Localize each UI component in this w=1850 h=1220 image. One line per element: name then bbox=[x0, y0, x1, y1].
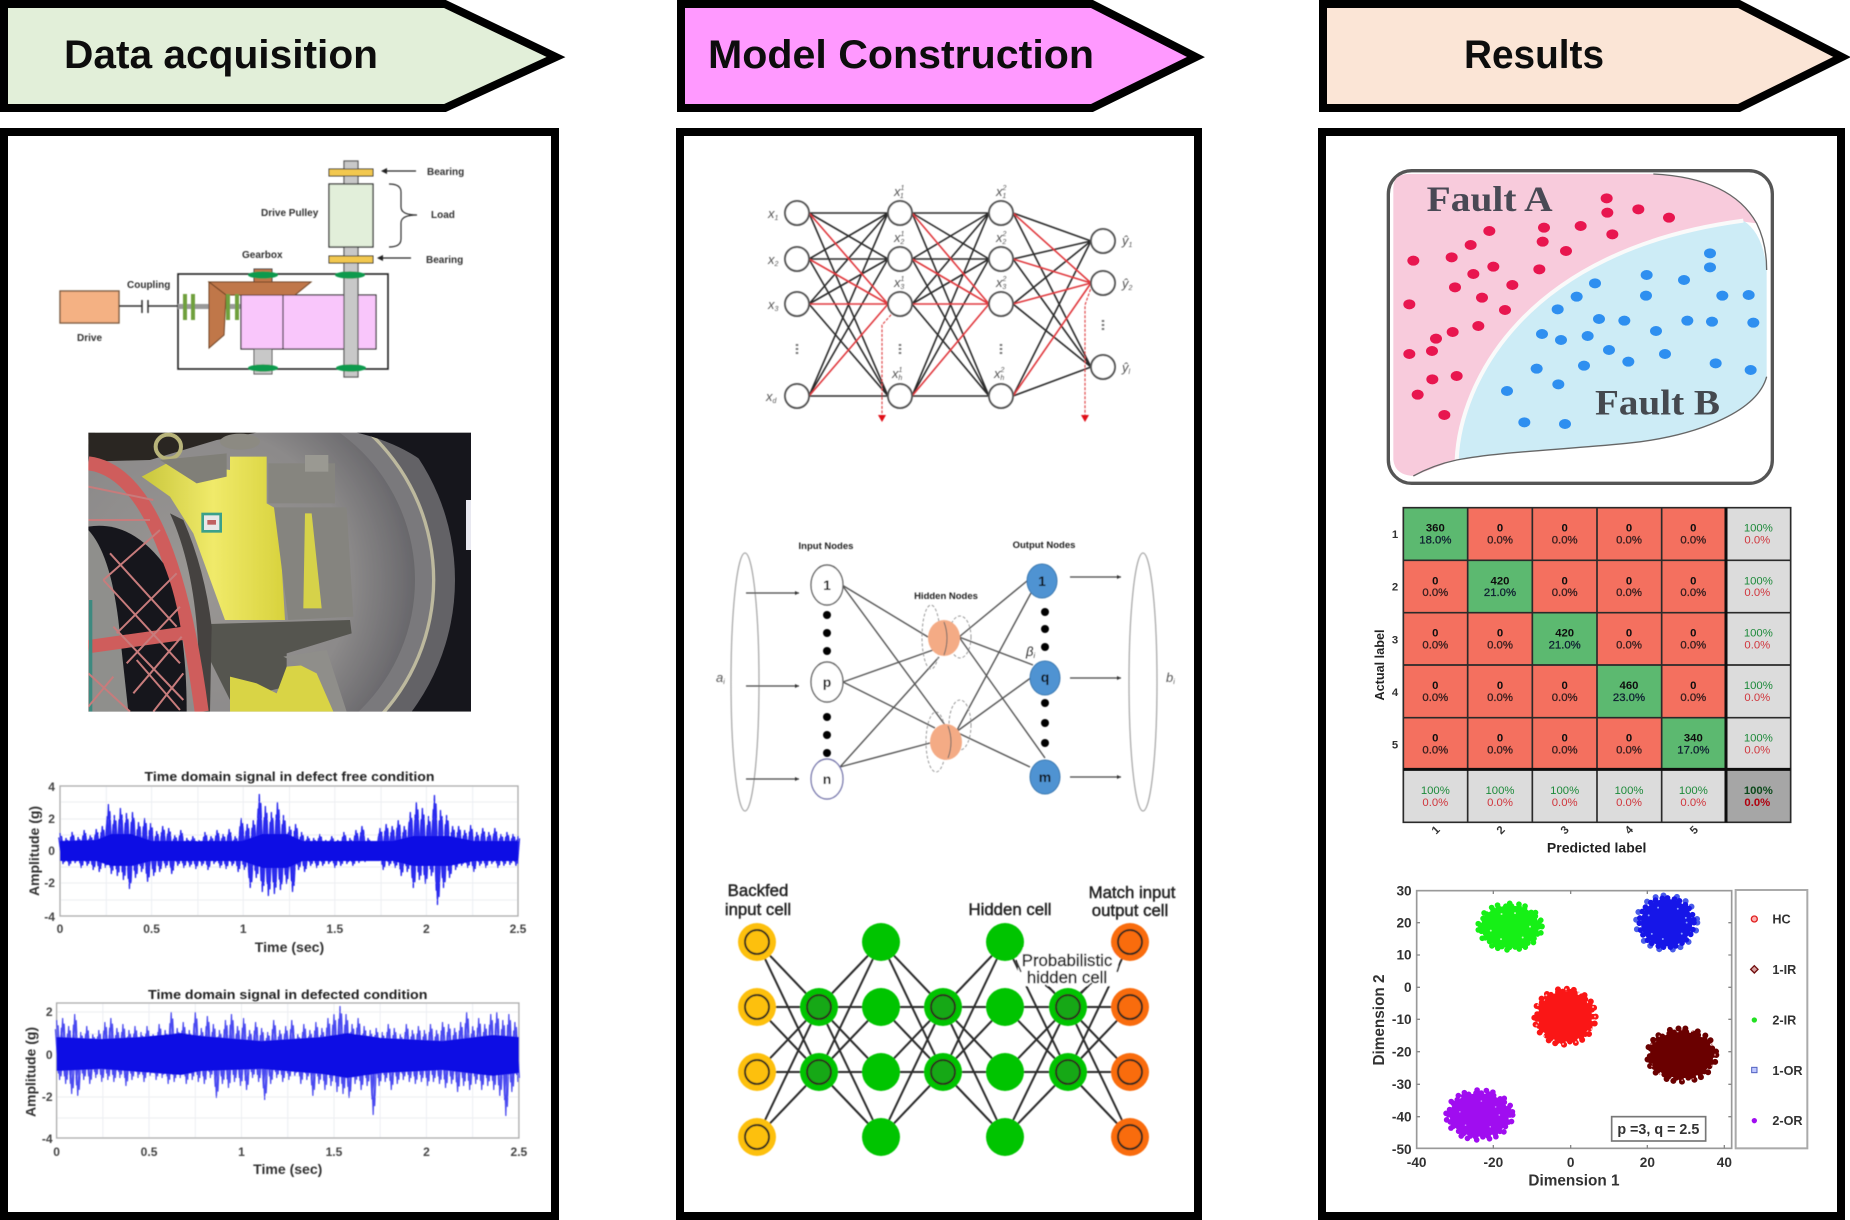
confusion matrix: 420 bbox=[1491, 575, 1509, 587]
scatter plot: t-SNE clusters: 10 bbox=[1396, 948, 1412, 963]
heading arrow: Model Construction: Model Construction bbox=[708, 33, 1094, 77]
chart: time domain signal in defect free condition: Time domain signal in defect free condition bbox=[145, 769, 434, 784]
chart: time domain signal in defected condition bbox=[22, 987, 528, 1177]
network diagram: deep belief network: x bbox=[996, 230, 1002, 245]
network diagram: deep belief network: 2 bbox=[1001, 239, 1006, 246]
network diagram: deep belief network: x bbox=[894, 184, 900, 199]
heading arrow: Data acquisition bbox=[4, 4, 556, 108]
gearbox schematic: Bearing bbox=[426, 255, 463, 266]
confusion matrix: 100% bbox=[1744, 785, 1773, 797]
confusion matrix: 0.0% bbox=[1552, 534, 1578, 546]
confusion matrix: 3 bbox=[1392, 634, 1398, 646]
network diagram: probabilistic cells: hidden cell bbox=[1027, 968, 1107, 987]
network diagram: deep belief network: 1 bbox=[900, 231, 904, 238]
confusion matrix: 460 bbox=[1620, 680, 1638, 692]
network diagram: extreme learning machine: i bbox=[1033, 653, 1035, 660]
confusion matrix: 0.0% bbox=[1422, 797, 1448, 809]
network diagram: extreme learning machine: a bbox=[716, 670, 723, 685]
gearbox schematic bbox=[60, 161, 464, 377]
confusion matrix: 0.0% bbox=[1422, 692, 1448, 704]
network diagram: deep belief network: x bbox=[996, 275, 1002, 290]
confusion matrix: 5 bbox=[1688, 824, 1701, 837]
scatter plot: t-SNE clusters: 0 bbox=[1567, 1155, 1575, 1170]
confusion matrix: Actual label bbox=[1373, 629, 1387, 701]
confusion matrix: 0.0% bbox=[1744, 534, 1770, 546]
confusion matrix: 1 bbox=[1430, 824, 1443, 837]
decision boundary plot: Fault A and Fault B: Fault A bbox=[1427, 179, 1553, 219]
network diagram: deep belief network: d bbox=[772, 398, 778, 405]
confusion matrix: 0 bbox=[1690, 523, 1696, 535]
legend: 2-IR bbox=[1772, 1014, 1796, 1028]
confusion matrix: 0 bbox=[1626, 733, 1632, 745]
network diagram: extreme learning machine: p bbox=[823, 674, 831, 690]
confusion matrix: 0.0% bbox=[1487, 639, 1513, 651]
confusion matrix: 0 bbox=[1626, 523, 1632, 535]
confusion matrix: 360 bbox=[1426, 523, 1445, 535]
network diagram: probabilistic cells: input cell bbox=[725, 900, 791, 919]
chart: time domain signal in defect free condition: Time (sec) bbox=[255, 939, 324, 955]
network diagram: deep belief network: h bbox=[1000, 375, 1004, 382]
confusion matrix: 2 bbox=[1392, 582, 1398, 594]
heading arrow: Results: Results bbox=[1464, 33, 1604, 77]
scatter plot: t-SNE clusters: -10 bbox=[1392, 1012, 1412, 1027]
confusion matrix: 100% bbox=[1486, 785, 1514, 797]
confusion matrix: 0 bbox=[1432, 628, 1438, 640]
confusion matrix: 21.0% bbox=[1484, 587, 1516, 599]
network diagram: probabilistic cells: Probabilistic bbox=[1022, 951, 1112, 970]
panel: model construction bbox=[680, 132, 1198, 1216]
waveform: defected bbox=[55, 1006, 519, 1116]
confusion matrix: 0 bbox=[1432, 575, 1438, 587]
chart: time domain signal in defected condition: -4 bbox=[42, 1132, 53, 1146]
confusion matrix: 0.0% bbox=[1552, 797, 1578, 809]
confusion matrix: 0 bbox=[1432, 733, 1438, 745]
confusion matrix: 100% bbox=[1744, 628, 1773, 640]
network diagram: deep belief network: 2 bbox=[1002, 276, 1006, 283]
network diagram: extreme learning machine: q bbox=[1041, 669, 1049, 685]
confusion matrix: 0.0% bbox=[1616, 797, 1642, 809]
network diagram: extreme learning machine: β bbox=[1026, 644, 1033, 659]
chart: time domain signal in defect free condition: 2 bbox=[423, 922, 430, 936]
panel: data acquisition bbox=[4, 132, 555, 1216]
confusion matrix: 0.0% bbox=[1744, 744, 1770, 756]
heading arrow: Model Construction bbox=[681, 4, 1196, 108]
cluster: 1-OR bbox=[1636, 895, 1697, 950]
network diagram: extreme learning machine: n bbox=[823, 771, 831, 787]
confusion matrix: 0.0% bbox=[1552, 692, 1578, 704]
network diagram: deep belief network: 2 bbox=[1128, 285, 1132, 292]
chart: time domain signal in defect free condition: 1.5 bbox=[326, 922, 343, 936]
legend: 1-OR bbox=[1772, 1064, 1803, 1078]
scatter plot: t-SNE clusters: -50 bbox=[1392, 1142, 1412, 1157]
confusion matrix: 0 bbox=[1432, 680, 1438, 692]
confusion matrix: 420 bbox=[1555, 628, 1574, 640]
confusion matrix: 100% bbox=[1421, 785, 1450, 797]
scatter plot: t-SNE clusters: -30 bbox=[1392, 1077, 1412, 1092]
network diagram: extreme learning machine: 1 bbox=[823, 577, 831, 593]
scatter plot: t-SNE clusters bbox=[1371, 883, 1807, 1189]
decision boundary plot: Fault A and Fault B: Fault B bbox=[1595, 382, 1720, 422]
network diagram: deep belief network: ŷ bbox=[1122, 276, 1128, 291]
chart: time domain signal in defected condition: 0 bbox=[53, 1145, 60, 1159]
chart: time domain signal in defect free condition bbox=[26, 769, 527, 955]
confusion matrix: 0 bbox=[1562, 523, 1568, 535]
confusion matrix: 0.0% bbox=[1744, 797, 1770, 809]
panel: results bbox=[1322, 132, 1841, 1216]
gearbox schematic: Load bbox=[431, 210, 455, 221]
cluster: 1-IR bbox=[1647, 1028, 1716, 1082]
network diagram: deep belief network: 2 bbox=[1000, 367, 1004, 374]
network diagram: deep belief network: l bbox=[1128, 369, 1130, 376]
network diagram: deep belief network: 3 bbox=[774, 306, 778, 313]
confusion matrix: 100% bbox=[1679, 785, 1708, 797]
network diagram: extreme learning machine: Hidden Nodes bbox=[914, 591, 978, 602]
confusion matrix: 0.0% bbox=[1487, 692, 1513, 704]
chart: time domain signal in defect free condition: 2 bbox=[48, 812, 55, 826]
confusion matrix: 0.0% bbox=[1422, 639, 1448, 651]
network diagram: probabilistic cells bbox=[725, 881, 1176, 1156]
confusion matrix: 0.0% bbox=[1680, 797, 1706, 809]
scatter plot: t-SNE clusters: 30 bbox=[1396, 883, 1412, 898]
confusion matrix: 0.0% bbox=[1422, 744, 1448, 756]
gearbox schematic: Bearing bbox=[427, 167, 464, 178]
chart: time domain signal in defected condition: Amplitude (g) bbox=[22, 1027, 39, 1117]
network diagram: deep belief network bbox=[765, 184, 1132, 422]
chart: time domain signal in defect free condition: 0 bbox=[57, 922, 64, 936]
network diagram: extreme learning machine: Output Nodes bbox=[1013, 540, 1075, 551]
legend: HC bbox=[1772, 913, 1791, 927]
network diagram: deep belief network: x bbox=[768, 252, 774, 267]
confusion matrix: 0 bbox=[1562, 680, 1568, 692]
network diagram: deep belief network: h bbox=[898, 375, 902, 382]
network diagram: deep belief network: 1 bbox=[774, 215, 778, 222]
network diagram: deep belief network: x bbox=[768, 297, 774, 312]
confusion matrix: 0 bbox=[1690, 680, 1696, 692]
chart: time domain signal in defect free condition: 0 bbox=[48, 844, 55, 858]
gearbox schematic: Drive bbox=[77, 333, 102, 344]
chart: time domain signal in defected condition: 2 bbox=[46, 1005, 53, 1019]
confusion matrix: 18.0% bbox=[1419, 534, 1451, 546]
confusion matrix: 17.0% bbox=[1677, 744, 1709, 756]
chart: time domain signal in defect free condition: -2 bbox=[44, 876, 55, 890]
network diagram: probabilistic cells: output cell bbox=[1092, 901, 1168, 920]
confusion matrix: 0.0% bbox=[1680, 534, 1706, 546]
network diagram: deep belief network: 1 bbox=[900, 193, 904, 200]
chart: time domain signal in defected condition: 2 bbox=[423, 1145, 430, 1159]
gearbox schematic: Gearbox bbox=[242, 250, 283, 261]
legend bbox=[1751, 913, 1803, 1128]
confusion matrix: 0.0% bbox=[1422, 587, 1448, 599]
confusion matrix: 0.0% bbox=[1616, 744, 1642, 756]
network diagram: extreme learning machine: 1 bbox=[1038, 573, 1046, 589]
confusion matrix: 0 bbox=[1690, 628, 1696, 640]
confusion matrix: 21.0% bbox=[1549, 639, 1581, 651]
network diagram: deep belief network: 1 bbox=[1128, 242, 1132, 249]
confusion matrix: 100% bbox=[1744, 575, 1773, 587]
confusion matrix: 0 bbox=[1626, 628, 1632, 640]
confusion matrix: 1 bbox=[1392, 529, 1398, 541]
heading arrow: Data acquisition: Data acquisition bbox=[64, 33, 378, 77]
network diagram: extreme learning machine: m bbox=[1039, 769, 1051, 785]
network diagram: deep belief network: 3 bbox=[900, 284, 904, 291]
scatter plot: t-SNE clusters: 40 bbox=[1717, 1155, 1732, 1170]
confusion matrix: 4 bbox=[1392, 687, 1399, 699]
confusion matrix bbox=[1373, 508, 1791, 855]
chart: time domain signal in defected condition: 0.5 bbox=[141, 1145, 158, 1159]
chart: time domain signal in defect free condition: 1 bbox=[240, 922, 247, 936]
chart: time domain signal in defected condition: Time (sec) bbox=[253, 1161, 322, 1177]
network diagram: extreme learning machine bbox=[716, 540, 1175, 811]
scatter plot: t-SNE clusters: -20 bbox=[1392, 1044, 1412, 1059]
chart: time domain signal in defected condition: 1 bbox=[238, 1145, 245, 1159]
legend: 2-OR bbox=[1772, 1114, 1803, 1128]
confusion matrix: 100% bbox=[1744, 733, 1773, 745]
chart: time domain signal in defect free condition: 4 bbox=[48, 780, 55, 794]
confusion matrix: 340 bbox=[1684, 733, 1703, 745]
confusion matrix: 0 bbox=[1562, 575, 1568, 587]
gearbox schematic: Coupling bbox=[127, 280, 170, 291]
confusion matrix: 0 bbox=[1497, 680, 1503, 692]
confusion matrix: 0 bbox=[1562, 733, 1568, 745]
confusion matrix: 0.0% bbox=[1487, 534, 1513, 546]
confusion matrix: 0.0% bbox=[1616, 639, 1642, 651]
network diagram: deep belief network: x bbox=[894, 230, 900, 245]
chart: time domain signal in defect free condition: Amplitude (g) bbox=[26, 806, 42, 896]
gearbox schematic: Drive Pulley bbox=[261, 208, 319, 219]
confusion matrix: 0.0% bbox=[1680, 587, 1706, 599]
network diagram: deep belief network: 1 bbox=[900, 185, 904, 192]
confusion matrix: 23.0% bbox=[1613, 692, 1645, 704]
network diagram: extreme learning machine: Input Nodes bbox=[799, 541, 853, 552]
chart: time domain signal in defected condition: 0 bbox=[46, 1048, 53, 1062]
scatter plot: t-SNE clusters: -40 bbox=[1392, 1109, 1412, 1124]
scatter plot: t-SNE clusters: 0 bbox=[1404, 980, 1412, 995]
network diagram: deep belief network: ŷ bbox=[1122, 360, 1128, 375]
chart: time domain signal in defect free condition: 2.5 bbox=[510, 922, 527, 936]
network diagram: probabilistic cells: Match input bbox=[1089, 883, 1176, 902]
confusion matrix: 4 bbox=[1623, 824, 1637, 837]
network diagram: deep belief network: 3 bbox=[1002, 284, 1006, 291]
confusion matrix: 3 bbox=[1559, 824, 1572, 837]
network diagram: deep belief network: 1 bbox=[900, 276, 904, 283]
cluster: 2-OR bbox=[1446, 1090, 1513, 1140]
confusion matrix: 0.0% bbox=[1680, 639, 1706, 651]
scatter plot: t-SNE clusters: -20 bbox=[1483, 1155, 1504, 1170]
chart: time domain signal in defected condition: -2 bbox=[42, 1090, 53, 1104]
confusion matrix: 2 bbox=[1495, 824, 1508, 837]
decision boundary plot: Fault A and Fault B bbox=[1388, 171, 1772, 483]
confusion matrix: 0.0% bbox=[1552, 744, 1578, 756]
network diagram: deep belief network: 2 bbox=[1002, 185, 1006, 192]
chart: time domain signal in defect free condition: -4 bbox=[44, 910, 55, 924]
confusion matrix: 0.0% bbox=[1487, 744, 1513, 756]
cluster: HC bbox=[1534, 989, 1596, 1045]
network diagram: deep belief network: 1 bbox=[1002, 193, 1006, 200]
confusion matrix: 0 bbox=[1626, 575, 1632, 587]
scatter plot: t-SNE clusters: 20 bbox=[1396, 915, 1412, 930]
photo: bearing housing bbox=[88, 432, 471, 712]
network diagram: extreme learning machine: i bbox=[723, 679, 725, 686]
scatter plot: t-SNE clusters: p =3, q = 2.5 bbox=[1617, 1122, 1699, 1138]
confusion matrix: 0.0% bbox=[1680, 692, 1706, 704]
confusion matrix: 0 bbox=[1497, 523, 1503, 535]
confusion matrix: 100% bbox=[1744, 680, 1773, 692]
network diagram: extreme learning machine: i bbox=[1173, 679, 1175, 686]
network diagram: deep belief network: 2 bbox=[1002, 231, 1006, 238]
chart: time domain signal in defected condition: Time domain signal in defected condition bbox=[148, 987, 427, 1002]
network diagram: deep belief network: 2 bbox=[899, 239, 904, 246]
confusion matrix: 100% bbox=[1744, 523, 1773, 535]
network diagram: deep belief network: x bbox=[766, 389, 772, 404]
scatter plot: t-SNE clusters: Dimension 2 bbox=[1371, 974, 1388, 1066]
scatter plot: t-SNE clusters: 20 bbox=[1640, 1155, 1655, 1170]
network diagram: deep belief network: x bbox=[994, 366, 1000, 381]
scatter plot: t-SNE clusters: -40 bbox=[1407, 1155, 1427, 1170]
network diagram: extreme learning machine: b bbox=[1166, 670, 1173, 685]
network diagram: deep belief network: x bbox=[894, 275, 900, 290]
confusion matrix: 0.0% bbox=[1616, 534, 1642, 546]
legend: 1-IR bbox=[1772, 963, 1796, 977]
network diagram: probabilistic cells: Backfed bbox=[728, 881, 788, 900]
waveform: defect free bbox=[59, 794, 520, 905]
confusion matrix: 100% bbox=[1615, 785, 1643, 797]
network diagram: deep belief network: x bbox=[996, 184, 1002, 199]
chart: time domain signal in defect free condition: 0.5 bbox=[143, 922, 160, 936]
confusion matrix: 0.0% bbox=[1744, 639, 1770, 651]
network diagram: deep belief network: x bbox=[768, 206, 774, 221]
confusion matrix: 5 bbox=[1392, 740, 1398, 752]
confusion matrix: 0 bbox=[1690, 575, 1696, 587]
network diagram: deep belief network: 1 bbox=[898, 367, 902, 374]
network diagram: probabilistic cells: Hidden cell bbox=[968, 900, 1052, 919]
confusion matrix: 0.0% bbox=[1616, 587, 1642, 599]
cluster: 2-IR bbox=[1478, 903, 1542, 950]
network diagram: deep belief network: 2 bbox=[774, 261, 778, 268]
confusion matrix: Predicted label bbox=[1547, 839, 1646, 855]
confusion matrix: 0 bbox=[1497, 628, 1503, 640]
heading arrow: Results bbox=[1323, 4, 1842, 108]
confusion matrix: 0.0% bbox=[1744, 692, 1770, 704]
confusion matrix: 0 bbox=[1497, 733, 1503, 745]
chart: time domain signal in defected condition: 1.5 bbox=[326, 1145, 343, 1159]
confusion matrix: 0.0% bbox=[1487, 797, 1513, 809]
confusion matrix: 100% bbox=[1550, 785, 1579, 797]
chart: time domain signal in defected condition: 2.5 bbox=[511, 1145, 528, 1159]
confusion matrix: 0.0% bbox=[1744, 587, 1770, 599]
network diagram: deep belief network: x bbox=[892, 366, 898, 381]
network diagram: deep belief network: ŷ bbox=[1122, 233, 1128, 248]
scatter plot: t-SNE clusters: Dimension 1 bbox=[1528, 1172, 1620, 1189]
confusion matrix: 0.0% bbox=[1552, 587, 1578, 599]
